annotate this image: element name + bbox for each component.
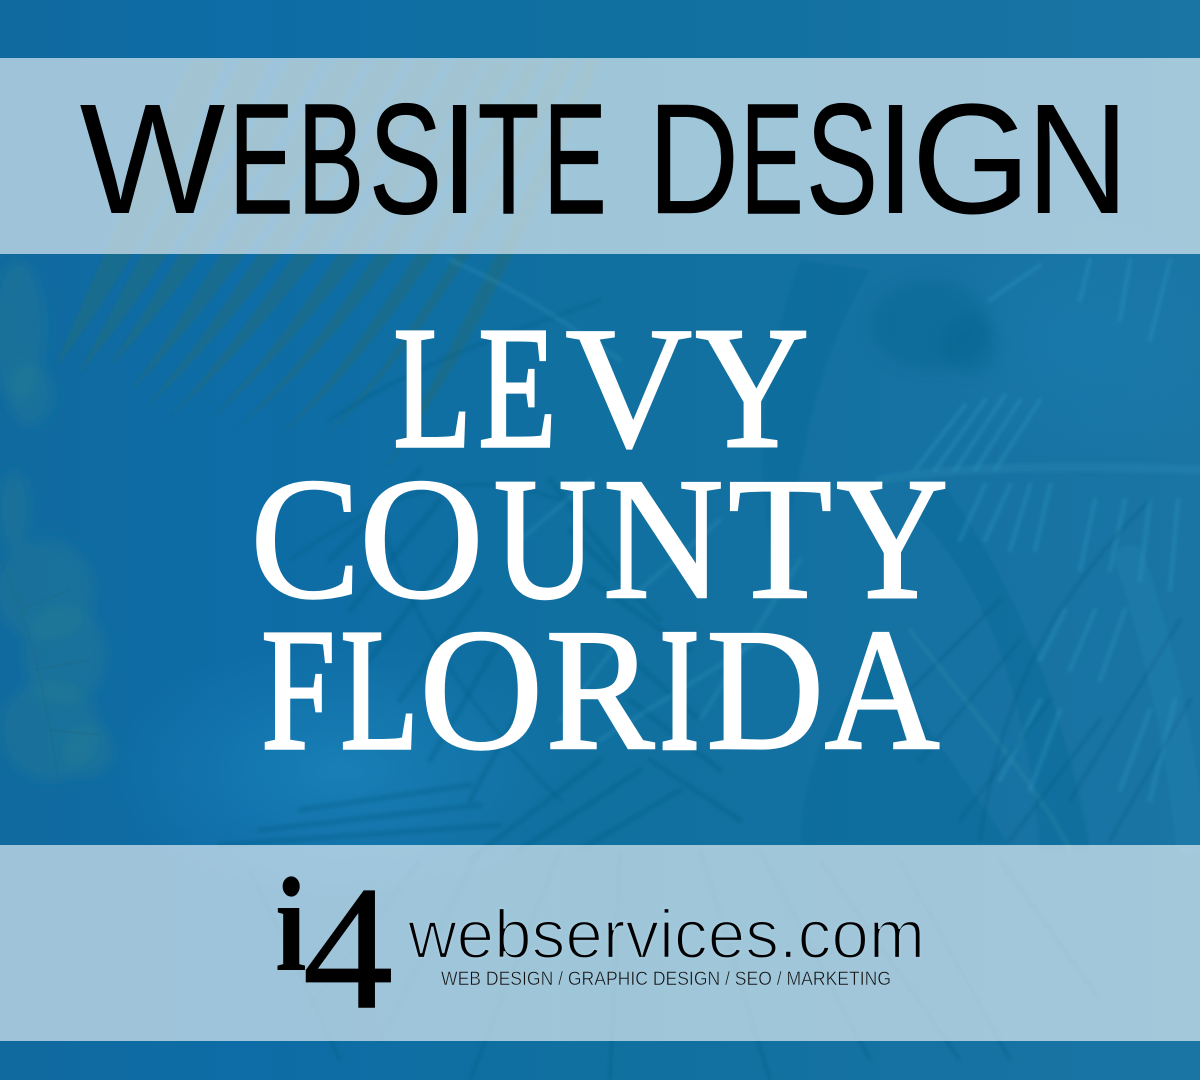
title: levy county florida: R: [546, 593, 654, 786]
title: levy county florida: I: [660, 593, 699, 786]
centre palm cluster behind title: [220, 300, 740, 860]
bottom band: [0, 845, 1200, 1046]
heading: website design: I: [440, 72, 479, 247]
heading: website design: W: [80, 72, 225, 247]
title: levy county florida: T: [728, 442, 832, 635]
title: levy county florida: O: [359, 442, 484, 635]
logo mark: i4: i: [275, 851, 307, 1000]
heading: website design: E: [741, 72, 803, 247]
title: levy county florida: D: [706, 593, 824, 786]
heading: website design: E: [544, 72, 606, 247]
heading: website design: T: [478, 72, 539, 247]
fronds through the lower band and bottom strip: [250, 850, 1100, 1080]
top-left palm leaves: [54, 60, 600, 470]
top band: [0, 58, 1200, 254]
title: levy county florida: Y: [837, 442, 948, 635]
logo tagline: WEB DESIGN / GRAPHIC DESIGN / SEO / MARKETING: [441, 968, 891, 990]
heading: website design: S: [806, 72, 878, 247]
heading: website design: S: [369, 72, 442, 247]
title: levy county florida: [250, 291, 948, 786]
title: levy county florida: A: [825, 593, 940, 786]
title: levy county florida: L: [394, 291, 472, 484]
heading: website design: D: [648, 72, 739, 247]
logo mark: i4: 4: [303, 851, 393, 1046]
title: levy county florida: C: [250, 442, 361, 635]
title: levy county florida: Y: [696, 291, 809, 484]
heading: website design: B: [298, 72, 364, 247]
logo: i4 webservices.com: [275, 851, 925, 1046]
heading: website design: G: [911, 72, 1031, 247]
left tree foliage: [0, 260, 114, 780]
title: levy county florida: U: [494, 442, 596, 635]
right palm: crown, trunks and fronds: [870, 280, 998, 375]
heading: website design: I: [876, 72, 915, 247]
heading: website design: [80, 72, 1129, 247]
title: levy county florida: O: [419, 593, 543, 786]
title: levy county florida: L: [340, 593, 419, 786]
heading: website design: E: [229, 72, 293, 247]
logo wordmark: webservices.com: [407, 896, 925, 973]
title: levy county florida: V: [565, 291, 692, 484]
title: levy county florida: F: [261, 593, 335, 786]
title: levy county florida: E: [478, 291, 556, 484]
title: levy county florida: N: [603, 442, 724, 635]
heading: website design: N: [1026, 72, 1129, 247]
